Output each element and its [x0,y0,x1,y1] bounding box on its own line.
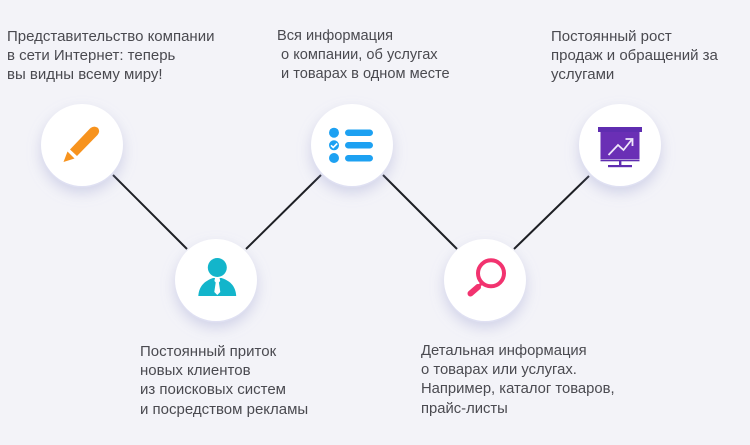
text: constant inflow: Постоянный приток новых клиентов из поисковых систем и посредством рекламы [140,343,308,418]
text: all information: Вся информация о компании, об услугах и товарах в одном месте [277,28,450,82]
node: checklist [311,104,393,188]
icon: pencil [64,127,99,162]
text: constant growth: Постоянный рост продаж и обращений за услугами [551,28,718,83]
node: pencil [41,104,123,188]
icon: person with tie [198,258,236,296]
icon: checklist [329,128,373,163]
node: magnifier [444,239,526,322]
node: presentation chart [579,104,661,188]
text: company representation: Представительство компании в сети Интернет: теперь вы видны всему миру! [7,28,214,83]
node: person [175,239,257,322]
icon: magnifier [470,260,504,294]
icon: presentation board [598,127,642,167]
connector lines [113,175,589,249]
text: detailed information: Детальная информация о товарах или услугах. Например, каталог товаров, прайс-листы [421,343,615,417]
